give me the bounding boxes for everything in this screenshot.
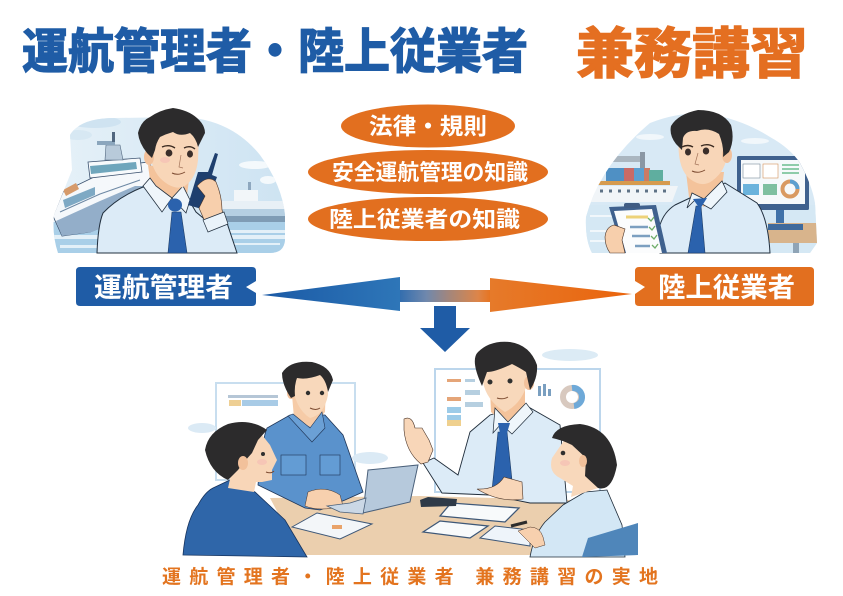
head bbox=[150, 129, 199, 188]
illustration: joint training meeting bbox=[183, 342, 638, 557]
title: main heading bbox=[22, 23, 808, 85]
ship hull bbox=[53, 162, 152, 236]
label: shore staff bbox=[635, 267, 814, 306]
panel: operations manager illustration bbox=[50, 108, 290, 255]
title: main heading: 運航管理者・陸上従業者 bbox=[22, 26, 528, 79]
label: operations manager bbox=[76, 267, 256, 306]
label: operations manager: 運航管理者 bbox=[94, 273, 233, 303]
panel: shore staff illustration bbox=[580, 110, 820, 255]
scene: ships at sea bbox=[50, 115, 290, 255]
person: manager with radio bbox=[97, 108, 237, 253]
label: shore staff: 陸上従業者 bbox=[658, 273, 795, 303]
person: worker in blue uniform bbox=[258, 362, 363, 510]
pill: law and regulations: 法律・規則 bbox=[369, 113, 487, 139]
table with documents bbox=[270, 496, 570, 555]
arrow: two-way link between roles bbox=[262, 277, 632, 312]
pill: shore staff knowledge: 陸上従業者の知識 bbox=[329, 207, 520, 232]
pill: shore staff knowledge bbox=[308, 197, 548, 241]
title: main heading: 兼務講習 bbox=[576, 23, 808, 85]
pill: law and regulations bbox=[341, 104, 515, 148]
person: presenter bbox=[404, 342, 567, 503]
pill: safety management knowledge bbox=[308, 150, 548, 194]
head bbox=[678, 126, 727, 184]
scene: container ship and monitor bbox=[580, 110, 820, 255]
person: shore staff with clipboard bbox=[605, 110, 770, 253]
arrow: down to joint training bbox=[420, 306, 470, 352]
pill: safety management knowledge: 安全運航管理の知識 bbox=[332, 160, 528, 185]
backdrop: screens bbox=[188, 349, 600, 492]
laptop bbox=[327, 465, 418, 514]
person: back view in blue jacket bbox=[183, 422, 307, 557]
person: woman taking notes bbox=[511, 424, 638, 557]
caption: joint training: 運航管理者・陸上従業者 兼務講習の実地 bbox=[162, 565, 658, 588]
